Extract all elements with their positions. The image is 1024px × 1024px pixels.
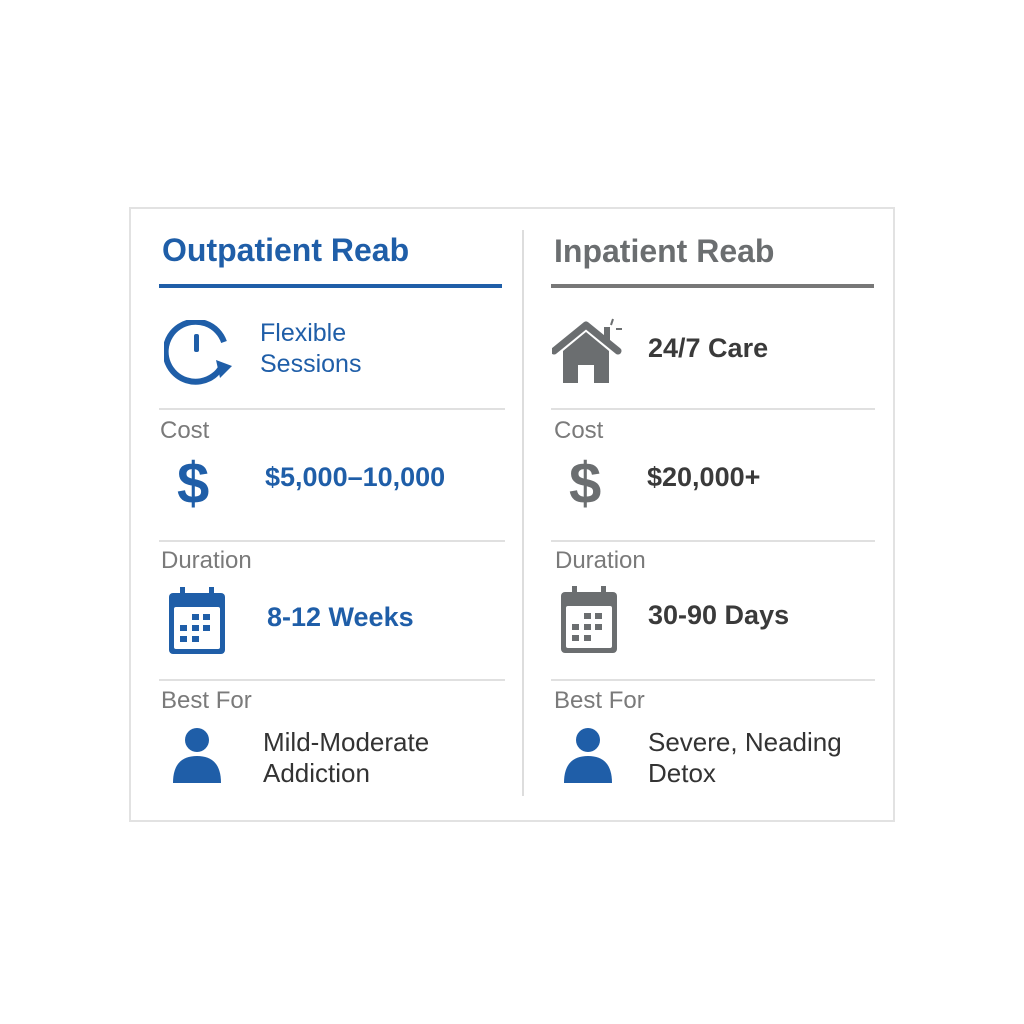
frame: [129, 207, 895, 822]
icon: clock: [164, 320, 232, 385]
text: 24/7 care: 24/7 Care: [648, 333, 768, 363]
value: cost: $20,000+: [647, 462, 760, 492]
text: flexible sessions: [260, 319, 361, 378]
label: duration: Duration: [161, 547, 252, 574]
value: best for: [648, 727, 842, 788]
value: best for: Detox: [648, 758, 716, 788]
icon: person: [173, 728, 221, 783]
value: best for: Severe, Neading: [648, 727, 842, 757]
text: flexible sessions: Sessions: [260, 350, 361, 378]
icon: person: [564, 728, 612, 783]
label: best for: Best For: [161, 687, 252, 714]
panel: inpatient: [551, 233, 875, 788]
heading: outpatient: Outpatient Reab: [162, 232, 409, 268]
icon: house: [552, 318, 622, 383]
label: duration: Duration: [555, 547, 646, 574]
icon: dollar: $: [569, 451, 601, 516]
icon: dollar: $: [177, 451, 209, 516]
heading: inpatient: Inpatient Reab: [554, 233, 774, 269]
label: cost: Cost: [160, 417, 209, 444]
label: cost: Cost: [554, 417, 603, 444]
icon: calendar: [169, 587, 225, 654]
value: best for: Addiction: [263, 758, 370, 788]
value: duration: 30-90 Days: [648, 600, 789, 630]
value: best for: Mild-Moderate: [263, 727, 429, 757]
icon: calendar: [561, 586, 617, 653]
label: best for: Best For: [554, 687, 645, 714]
panel: outpatient: [159, 232, 505, 788]
value: duration: 8-12 Weeks: [267, 602, 414, 632]
text: flexible sessions: Flexible: [260, 319, 346, 347]
value: best for: [263, 727, 429, 788]
value: cost: $5,000–10,000: [265, 462, 445, 492]
